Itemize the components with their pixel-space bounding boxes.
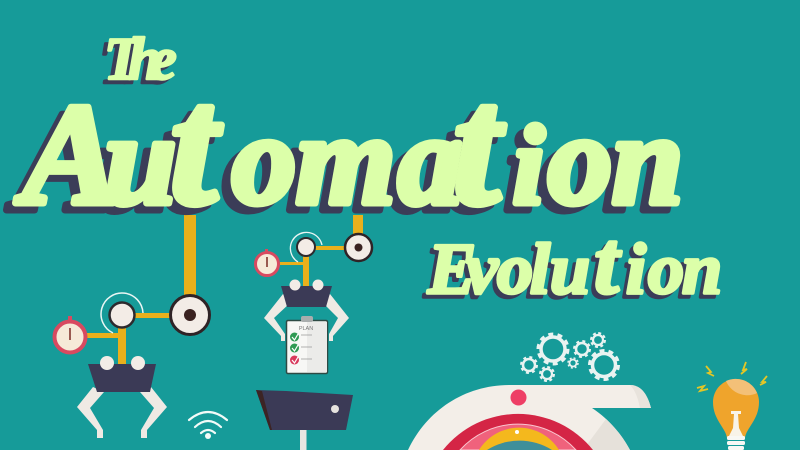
title shadow: u	[96, 96, 167, 238]
gears	[521, 333, 618, 381]
title fill: n	[612, 89, 683, 231]
title shadow: t	[590, 218, 618, 317]
title shadow: m	[287, 96, 387, 238]
title shadow: o	[223, 96, 287, 238]
title shadow: E	[423, 233, 472, 313]
title fill: n	[682, 229, 722, 309]
title fill: i	[626, 229, 646, 309]
title shadow: t	[444, 59, 496, 247]
title fill: m	[296, 89, 396, 231]
title fill: E	[427, 229, 476, 309]
robot arm 2	[256, 215, 372, 341]
title fill: u	[550, 229, 590, 309]
title shadow: t	[161, 59, 213, 247]
clipboard: plan: PLAN	[299, 326, 313, 332]
title fill: l	[530, 229, 550, 309]
title fill: The	[104, 26, 177, 92]
title shadow: i	[504, 111, 535, 235]
title shadow: l	[526, 233, 546, 313]
title fill	[15, 26, 722, 313]
title shadow: u	[546, 233, 586, 313]
clipboard: plan	[286, 316, 328, 374]
title shadow: o	[493, 233, 529, 313]
title fill: o	[648, 229, 684, 309]
title shadow	[6, 30, 718, 317]
title fill: t	[453, 52, 505, 240]
title shadow: o	[539, 96, 603, 238]
title fill: t	[594, 214, 622, 313]
icon: small stopwatch	[256, 249, 278, 276]
title shadow: n	[678, 233, 718, 313]
machine head on pole	[256, 390, 353, 450]
title fill: o	[232, 89, 296, 231]
icon: sparks	[697, 362, 767, 391]
machine body	[408, 385, 651, 450]
title	[6, 26, 722, 317]
title shadow: n	[603, 96, 674, 238]
title fill: i	[513, 104, 544, 228]
title fill: A	[15, 75, 120, 235]
icon: wifi	[189, 412, 227, 439]
title fill: o	[548, 89, 612, 231]
icon: light bulb	[697, 362, 767, 450]
title fill: t	[170, 52, 222, 240]
title shadow: The	[99, 30, 172, 96]
robot arm 1	[54, 215, 210, 438]
title shadow: a	[389, 96, 453, 238]
title shadow: i	[622, 233, 642, 313]
icon: stopwatch	[54, 316, 86, 352]
title shadow: o	[644, 233, 680, 313]
title fill: a	[398, 89, 462, 231]
title fill: u	[105, 89, 176, 231]
title shadow: v	[462, 233, 495, 313]
title shadow: A	[6, 82, 111, 242]
title fill: v	[466, 229, 499, 309]
title fill: o	[497, 229, 533, 309]
